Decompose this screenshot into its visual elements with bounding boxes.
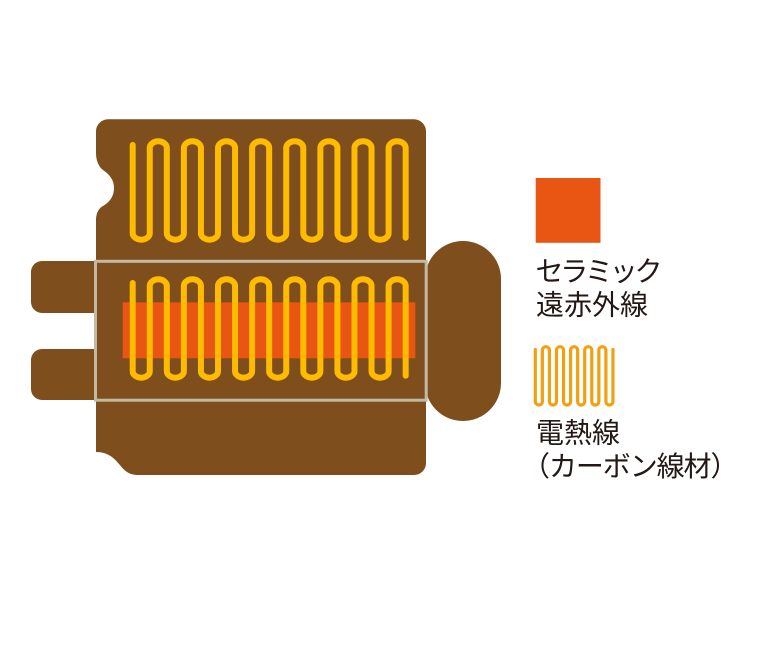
right rounded grip (425, 241, 501, 421)
beige frame (96, 261, 426, 400)
legend swatch: orange square (536, 178, 600, 243)
heater unit diagram (31, 119, 501, 475)
lower heating wire (133, 279, 406, 378)
legend: heating wire (522, 347, 738, 482)
lower left tab (31, 349, 100, 400)
legend label line 2: 遠赤外線 (536, 290, 648, 320)
upper left tab (31, 261, 100, 313)
main body (96, 119, 426, 475)
legend label: heating wire: 電熱線 (536, 418, 620, 448)
legend label: carbon wire material: （カーボン線材） (522, 451, 738, 482)
ceramic far-infrared band (123, 302, 415, 358)
legend: ceramic far-infrared (536, 178, 662, 320)
legend icon: wire coil (535, 347, 613, 405)
legend label: ceramic far-infrared: セラミック (536, 256, 662, 287)
upper heating wire (133, 141, 406, 240)
